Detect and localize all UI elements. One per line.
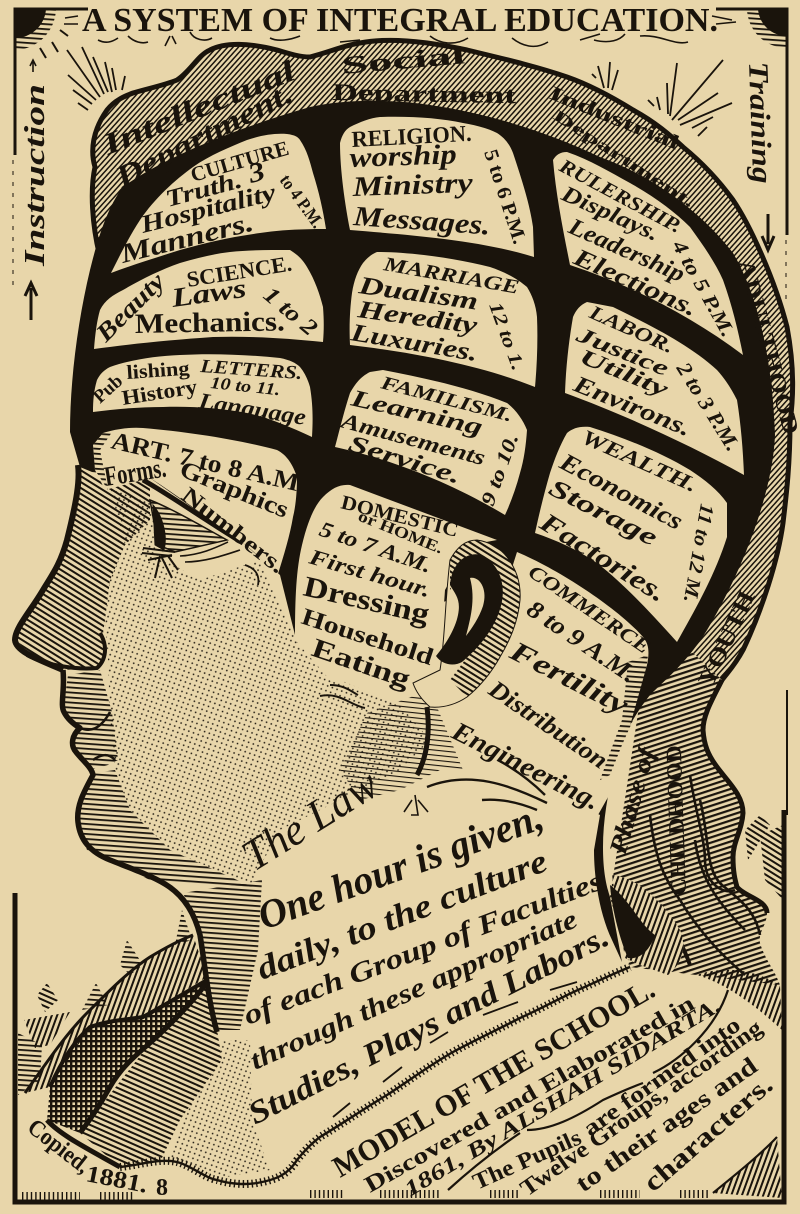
panel: familism xyxy=(335,370,527,515)
panel: rulership: Leadership xyxy=(564,213,688,288)
panel: domestic: Dressing xyxy=(300,571,433,631)
panel: culture: 3 xyxy=(244,156,268,189)
radiating rays xyxy=(67,47,732,136)
model of the school text block: Discovered and Elaborated in xyxy=(360,990,699,1197)
panel: letters: Pub xyxy=(89,371,127,408)
hair band labels: Department. xyxy=(550,107,697,211)
panel: commerce: 8 to 9 A.M. xyxy=(522,596,641,688)
collar and chest xyxy=(25,935,270,1178)
jaw and neck marks xyxy=(404,707,547,815)
panel: rulership xyxy=(553,152,743,355)
copied inscription: 1881. xyxy=(84,1161,150,1199)
panel: marriage: MARRIAGE xyxy=(381,253,521,299)
panel: domestic: Household xyxy=(298,604,437,671)
panel: wealth: Economics xyxy=(554,448,687,536)
mouth and cheek marks xyxy=(320,685,365,708)
panel: religion: Ministry xyxy=(351,168,474,203)
robe neckline fringe xyxy=(120,967,630,1184)
icon: ear xyxy=(413,540,520,707)
panel: letters: lishing xyxy=(126,358,190,384)
panel: culture: to 4 P.M. xyxy=(276,171,328,232)
panel: science: SCIENCE. xyxy=(185,251,293,292)
shoulder hatching xyxy=(697,970,782,1198)
panel: letters: LETTERS. xyxy=(198,356,303,384)
law text block: daily, to the culture xyxy=(252,843,552,987)
hair band labels: Phase of xyxy=(604,741,662,859)
panel: rulership: 4 to 5 P.M. xyxy=(667,236,739,341)
panel: domestic: First hour. xyxy=(305,543,434,602)
title: A SYSTEM OF INTEGRAL EDUCATION. xyxy=(82,2,718,39)
panel: marriage: Dualism xyxy=(356,272,480,316)
panel: letters: Language xyxy=(196,388,308,430)
panel: domestic: or HOME. xyxy=(356,508,445,557)
title flourishes xyxy=(64,16,736,46)
panel: religion: Messages. xyxy=(351,201,491,242)
pupils text block: Twelve Groups, according xyxy=(516,1015,767,1201)
law text block: of each Group of Faculties xyxy=(239,866,607,1032)
panel: domestic xyxy=(295,485,497,694)
panel: science: Beauty xyxy=(90,267,171,348)
panel: familism: Learning xyxy=(347,385,485,441)
panel: art: Forms. xyxy=(102,453,168,493)
law text block: The Law xyxy=(233,759,387,880)
panel: science xyxy=(90,250,324,349)
panel: commerce: Fertility xyxy=(504,635,634,722)
panel: labor xyxy=(565,301,745,475)
law text block: through these appropriate xyxy=(245,904,582,1075)
dividing flourish xyxy=(448,990,728,1190)
copied inscription xyxy=(22,1114,168,1201)
panel: wealth: Factories. xyxy=(534,506,672,608)
panel: culture xyxy=(111,134,328,273)
hair: upper band xyxy=(92,40,793,700)
hair band labels: ADULTHOOD xyxy=(733,257,800,437)
panel: letters xyxy=(89,354,313,437)
panel: wealth: WEALTH. xyxy=(578,425,701,497)
panel: labor: 2 to 3 P.M. xyxy=(671,357,745,455)
panel: commerce: COMMERCE xyxy=(524,561,654,659)
panel: familism: FAMILISM. xyxy=(377,372,515,427)
law text block: Studies, Plays and Labors. xyxy=(242,918,615,1131)
corner ornament: top right xyxy=(747,9,787,48)
face shading xyxy=(15,467,463,1030)
panel: domestic: DOMESTIC xyxy=(339,492,461,542)
pupils text block: characters. xyxy=(637,1069,778,1198)
panel: wealth xyxy=(534,425,727,642)
copied inscription: 8 xyxy=(156,1175,168,1201)
panel: religion xyxy=(340,117,534,257)
panel: familism: Amusements xyxy=(336,407,488,470)
icon: eye xyxy=(142,480,258,585)
panel: art: Numbers. xyxy=(177,482,290,578)
hair band labels: Department xyxy=(332,80,516,109)
panel: rulership: Elections. xyxy=(568,243,701,322)
panel: religion: worship xyxy=(349,139,457,174)
side label: instruction xyxy=(20,60,51,320)
side label: training: Training xyxy=(742,61,777,184)
corner ornament: top left xyxy=(15,9,68,58)
hair band labels: Social xyxy=(340,42,466,80)
panel: art: ART. 7 to 8 A.M xyxy=(109,428,302,497)
panel: labor: LABOR. xyxy=(585,301,677,358)
panel: letters: History xyxy=(120,374,199,410)
panel: labor: Justice xyxy=(572,321,673,381)
panel: art: Graphics xyxy=(176,456,292,524)
panel: labor: Utility xyxy=(576,343,672,402)
hair band labels: CHILDHOOD xyxy=(661,745,691,896)
panel: commerce: Engineering. xyxy=(446,715,605,816)
panel: familism: Service. xyxy=(345,431,464,490)
panel: domestic: 5 to 7 A.M. xyxy=(316,516,435,578)
panel: marriage: Luxuries. xyxy=(348,319,480,367)
model of the school text block: MODEL OF THE SCHOOL. xyxy=(327,972,660,1184)
pupils text block: are formed into xyxy=(578,1012,745,1141)
bottom edge fringe xyxy=(22,1194,710,1196)
panel: familism: 9 to 10. xyxy=(477,431,523,509)
panel: culture: Hospitality xyxy=(137,179,279,239)
panel: science: Laws xyxy=(168,273,248,313)
panel: labor: Environs. xyxy=(569,371,694,442)
panel: religion: 5 to 6 P.M. xyxy=(479,147,530,247)
panel: letters: 10 to 11. xyxy=(210,373,281,399)
panel: wealth: Storage xyxy=(544,474,662,552)
panel: culture: Truth. xyxy=(163,167,245,213)
black skull grid xyxy=(70,101,775,962)
hair: lower flowing locks xyxy=(610,650,780,985)
pupils text block: to their ages and xyxy=(571,1052,763,1198)
panel: culture: CULTURE xyxy=(188,136,291,187)
panel: rulership: Displays. xyxy=(557,180,663,246)
side label: instruction: Instruction xyxy=(20,84,51,267)
hair band labels: Industrial xyxy=(546,82,683,155)
law text block: One hour is given, xyxy=(252,794,549,938)
panel: marriage xyxy=(348,252,537,387)
pupils text block xyxy=(469,1012,778,1201)
panel: wealth: 11 to 12 M. xyxy=(679,502,718,604)
copied inscription: Copied, xyxy=(22,1114,95,1179)
pupils text block: The Pupils xyxy=(469,1125,585,1195)
panel: art xyxy=(93,428,302,578)
hair band labels: Intellectual xyxy=(97,54,301,162)
panel: science: 1 to 2 xyxy=(259,282,322,341)
panel: commerce xyxy=(446,552,654,816)
grass tufts xyxy=(18,815,783,1095)
panel: marriage: 12 to 1. xyxy=(484,300,528,373)
law text block xyxy=(233,759,615,1131)
model of the school text block: 1861, By ALSHAH SIDARTA. xyxy=(400,992,725,1201)
panel: culture: Manners. xyxy=(116,207,256,269)
panel: marriage: Heredity xyxy=(355,296,480,340)
side label: training xyxy=(742,61,777,250)
panel: science: Mechanics. xyxy=(135,306,285,340)
face outline xyxy=(15,465,217,1032)
hair band labels: YOUTH xyxy=(694,587,761,691)
hair band labels: Department. xyxy=(109,77,298,195)
panel: religion: RELIGION. xyxy=(351,121,472,152)
hair band labels xyxy=(97,42,800,896)
panel: commerce: Distribution xyxy=(483,675,612,775)
panel: rulership: RULERSHIP. xyxy=(555,154,685,238)
panel: domestic: Eating xyxy=(308,632,415,694)
